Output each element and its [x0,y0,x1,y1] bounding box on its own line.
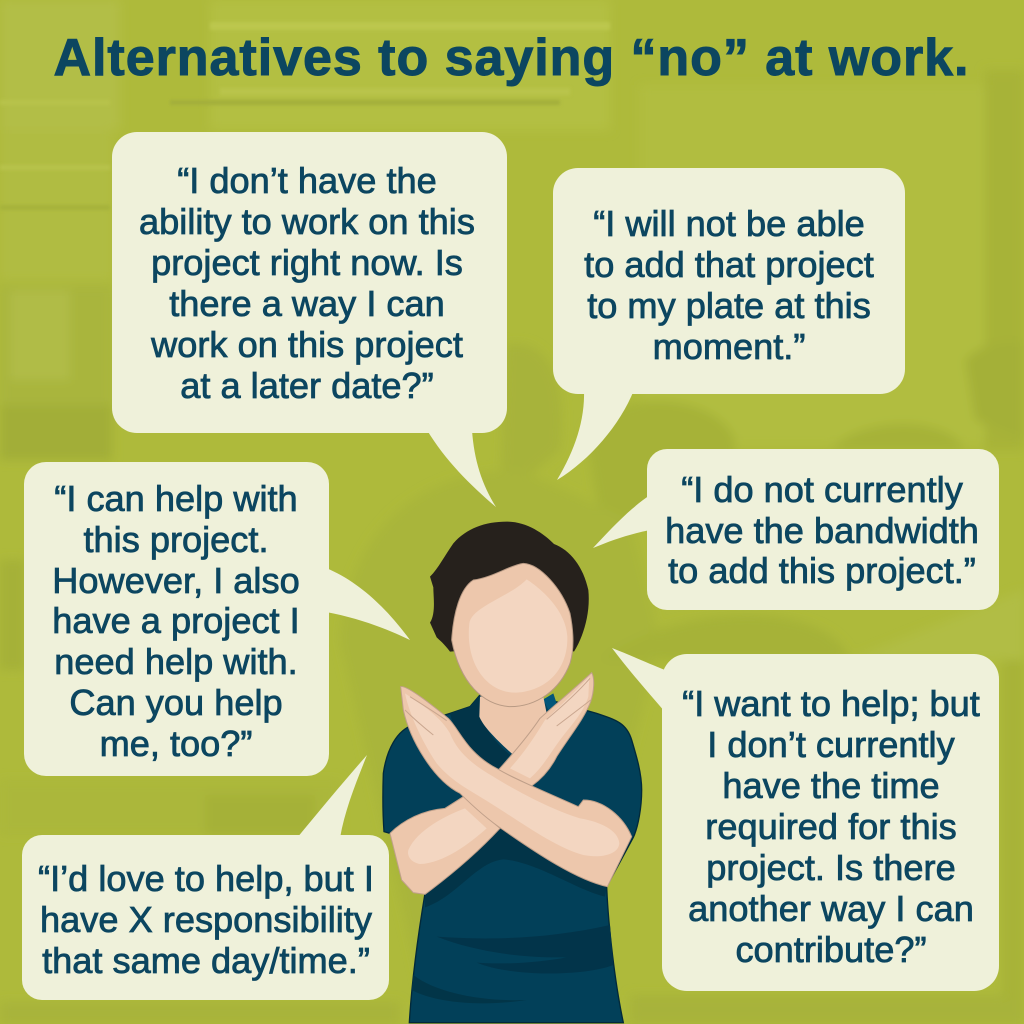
speech bubble: ability: “I don’t have the [177,160,437,201]
face [452,563,573,707]
speech bubble: responsibility: that same day/time.” [42,940,370,981]
speech bubble: bandwidth: have the bandwidth [665,510,979,551]
right hand and forearm (behind) [498,673,594,786]
speech bubble: contribute: I don’t currently [707,724,956,765]
lower arm forearm left [390,797,500,894]
main arm and left hand [401,687,632,887]
speech bubble: plate [553,168,905,480]
speech bubble: bandwidth: to add this project.” [668,550,976,591]
speech bubble: help me too: Can you help [69,682,283,723]
speech bubble: plate: to my plate at this [587,285,871,326]
speech bubble: bandwidth [593,449,999,610]
speech bubble: contribute: project. Is there [706,847,956,888]
speech bubble: responsibility: “I’d love to help, but I [38,858,374,899]
speech bubble: contribute: required for this [705,806,957,847]
speech bubble: contribute: “I want to help; but [682,683,980,724]
speech bubble: plate: moment.” [653,326,805,367]
shirt [383,695,642,1023]
speech bubble: ability [112,132,507,507]
title: Alternatives to saying “no” at work. [54,29,968,87]
speech bubble: bandwidth: “I do not currently [681,469,964,510]
speech bubble: ability: project right now. Is [151,242,463,283]
neck [479,697,547,755]
speech bubble: responsibility: have X responsibility [40,899,373,940]
speech bubble: ability: ability to work on this [139,201,475,242]
speech bubble: ability: at a later date?” [180,365,434,406]
speech bubble: contribute: another way I can [688,888,974,929]
figure: person crossing arms [383,522,642,1023]
speech bubble: help me too: me, too?” [100,723,252,764]
speech bubble: ability: there a way I can [169,283,445,324]
speech bubble: help me too: this project. [83,519,269,560]
shirt folds [412,693,613,1003]
speech bubble: help me too: have a project I [52,600,300,641]
speech bubble: responsibility [22,755,389,1000]
finger lines [405,678,591,735]
speech bubble: help me too: However, I also [52,560,300,601]
speech bubble: plate: “I will not be able [593,203,865,244]
hair [430,522,589,652]
speech bubble: contribute [612,648,999,991]
speech bubble: contribute: have the time [722,765,940,806]
speech bubble: help me too: “I can help with [54,478,298,519]
speech bubble: help me too: need help with. [54,641,298,682]
speech bubble: plate: to add that project [584,244,874,285]
speech bubble: help me too [24,462,410,776]
speech bubble: contribute: contribute?” [735,929,927,970]
speech bubble: ability: work on this project [150,324,463,365]
